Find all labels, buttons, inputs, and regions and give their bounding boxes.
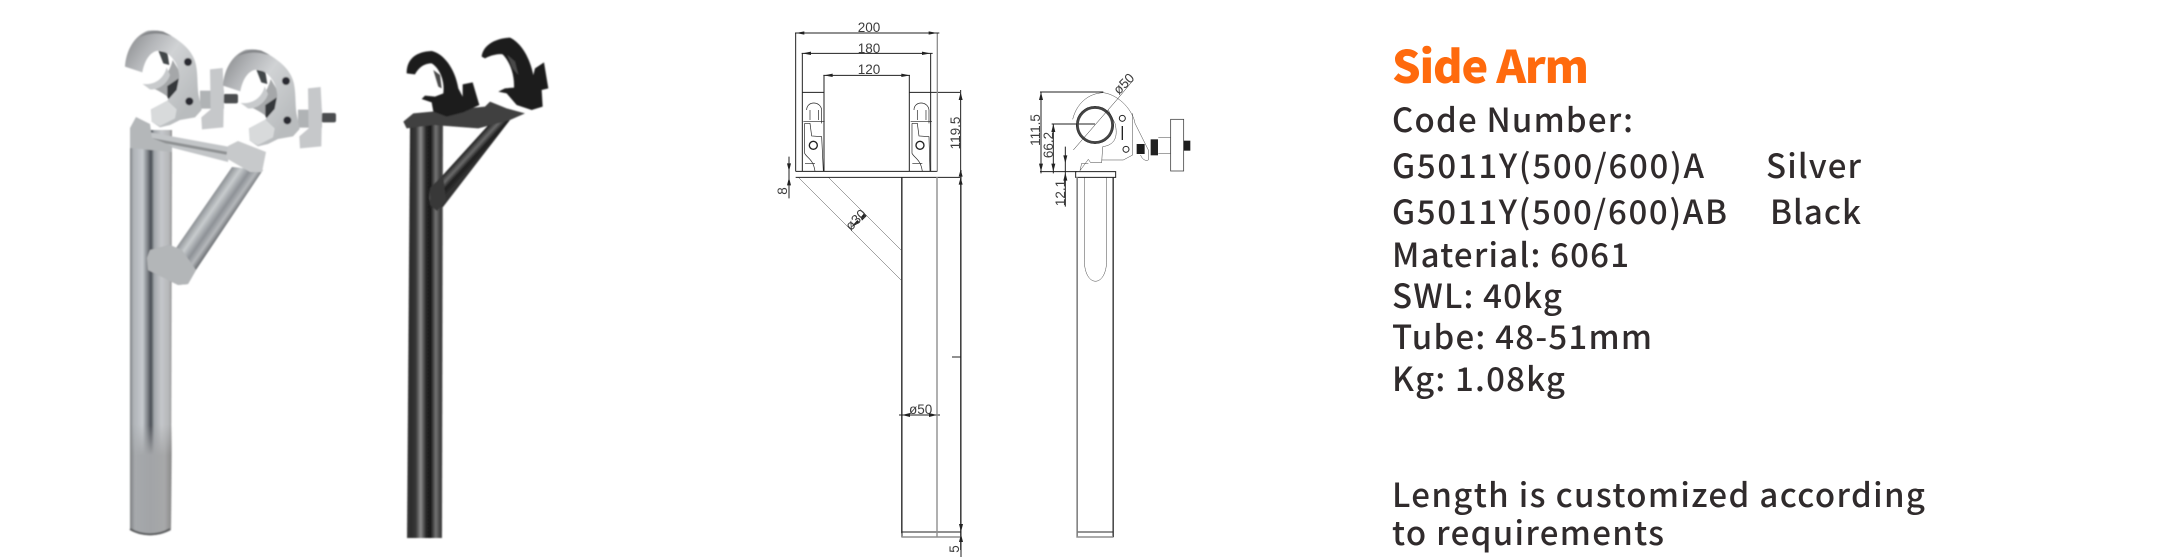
front view lower tube xyxy=(899,170,963,557)
black clamp right xyxy=(482,38,548,110)
technical drawing: side view xyxy=(1028,70,1190,537)
black brace foot xyxy=(430,175,446,211)
dimension labels: 120 xyxy=(858,62,880,77)
right clamp drawing xyxy=(911,103,932,171)
dimension labels: 200 xyxy=(858,20,880,35)
specification text: SWL: 40kg xyxy=(1392,270,1562,318)
dimension labels: 180 xyxy=(858,41,880,56)
silver clamp right xyxy=(223,49,336,148)
black main tube xyxy=(407,125,443,538)
side view dimension labels xyxy=(1028,70,1137,206)
silver collar xyxy=(130,117,172,152)
dimension labels: ø50 xyxy=(909,402,932,417)
dimension arrows 200 / 180 / 120 xyxy=(787,31,963,550)
specification text: Material: 6061 xyxy=(1392,229,1629,277)
black diagonal brace xyxy=(429,120,510,208)
side view dimension labels: 111.5 xyxy=(1028,114,1043,146)
side view dimension labels: ø50 xyxy=(1110,70,1137,97)
black arm details in zoom coordinates xyxy=(403,38,548,128)
dimension labels: 5 xyxy=(947,545,962,553)
specification text: Silver xyxy=(1766,140,1862,188)
silver tube bottom rim xyxy=(130,529,170,534)
side view geometry xyxy=(1039,80,1190,537)
photo: silver side arm xyxy=(125,30,336,535)
specification text: Code Number: xyxy=(1392,94,1633,142)
dimension labels xyxy=(775,20,963,553)
specification text: G5011Y(500/600)AB xyxy=(1392,186,1727,234)
silver main tube xyxy=(130,130,172,535)
black crossbar xyxy=(403,102,525,128)
side view plate and tube xyxy=(1076,172,1116,537)
silver diagonal brace xyxy=(147,167,263,285)
specification text xyxy=(1392,94,1862,401)
length note xyxy=(1392,469,1925,555)
side view dimension labels: 12.1 xyxy=(1053,180,1068,206)
left clamp drawing xyxy=(803,103,825,171)
title: Side Arm xyxy=(1392,31,1589,96)
side view clamp xyxy=(1073,80,1190,171)
silver end block xyxy=(226,141,266,172)
silver tube lower highlight xyxy=(130,420,172,535)
silver crossbar shadow xyxy=(152,138,228,155)
specification text: Kg: 1.08kg xyxy=(1392,353,1565,401)
silver crossbar xyxy=(148,132,230,162)
length note: to requirements xyxy=(1392,507,1664,555)
photo: black side arm xyxy=(403,38,548,538)
front view geometry xyxy=(787,31,963,550)
dimension labels: 119.5 xyxy=(948,117,963,149)
side view lower tube xyxy=(1077,177,1113,537)
silver brace elbow xyxy=(147,245,196,285)
black clamp highlights xyxy=(433,55,518,88)
dimension labels: ø30 xyxy=(842,206,869,233)
length note: Length is customized according xyxy=(1392,469,1925,517)
technical drawing: front view xyxy=(775,20,963,557)
specification text: Black xyxy=(1770,186,1861,234)
black clamp left xyxy=(407,51,479,117)
side view dimension labels: 66.2 xyxy=(1041,132,1056,158)
silver clamp left xyxy=(125,30,238,129)
specification text: Tube: 48-51mm xyxy=(1392,311,1652,359)
specification text: G5011Y(500/600)A xyxy=(1392,140,1704,188)
dimension labels: 8 xyxy=(775,187,790,195)
